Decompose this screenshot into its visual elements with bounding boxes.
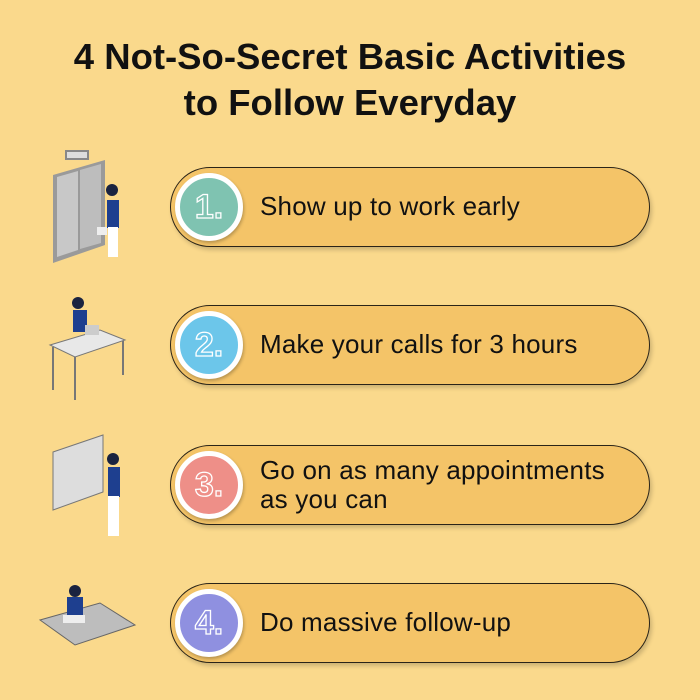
panel: 3 — [170, 445, 650, 525]
icon: desk — [48, 297, 126, 400]
icon: elevator — [53, 150, 119, 263]
icon: phone — [39, 585, 136, 646]
panel: 1 — [170, 167, 650, 247]
number 3 — [175, 451, 243, 519]
title — [74, 36, 626, 123]
number 1 — [175, 173, 243, 241]
icon: calendar — [52, 434, 120, 536]
text 2: Make your calls for 3 hours — [260, 329, 578, 359]
title: 4 Not-So-Secret Basic Activities — [74, 36, 626, 77]
text 1: Show up to work early — [260, 191, 520, 221]
number 2 — [175, 311, 243, 379]
number 4 — [175, 589, 243, 657]
text 3 — [260, 454, 605, 514]
text 3: as you can — [260, 484, 388, 514]
panel: 4 — [170, 583, 650, 663]
title: to Follow Everyday — [184, 82, 516, 123]
text 4: Do massive follow-up — [260, 607, 511, 637]
text 3: Go on as many appointments — [260, 454, 605, 484]
panel: 2 — [170, 305, 650, 385]
